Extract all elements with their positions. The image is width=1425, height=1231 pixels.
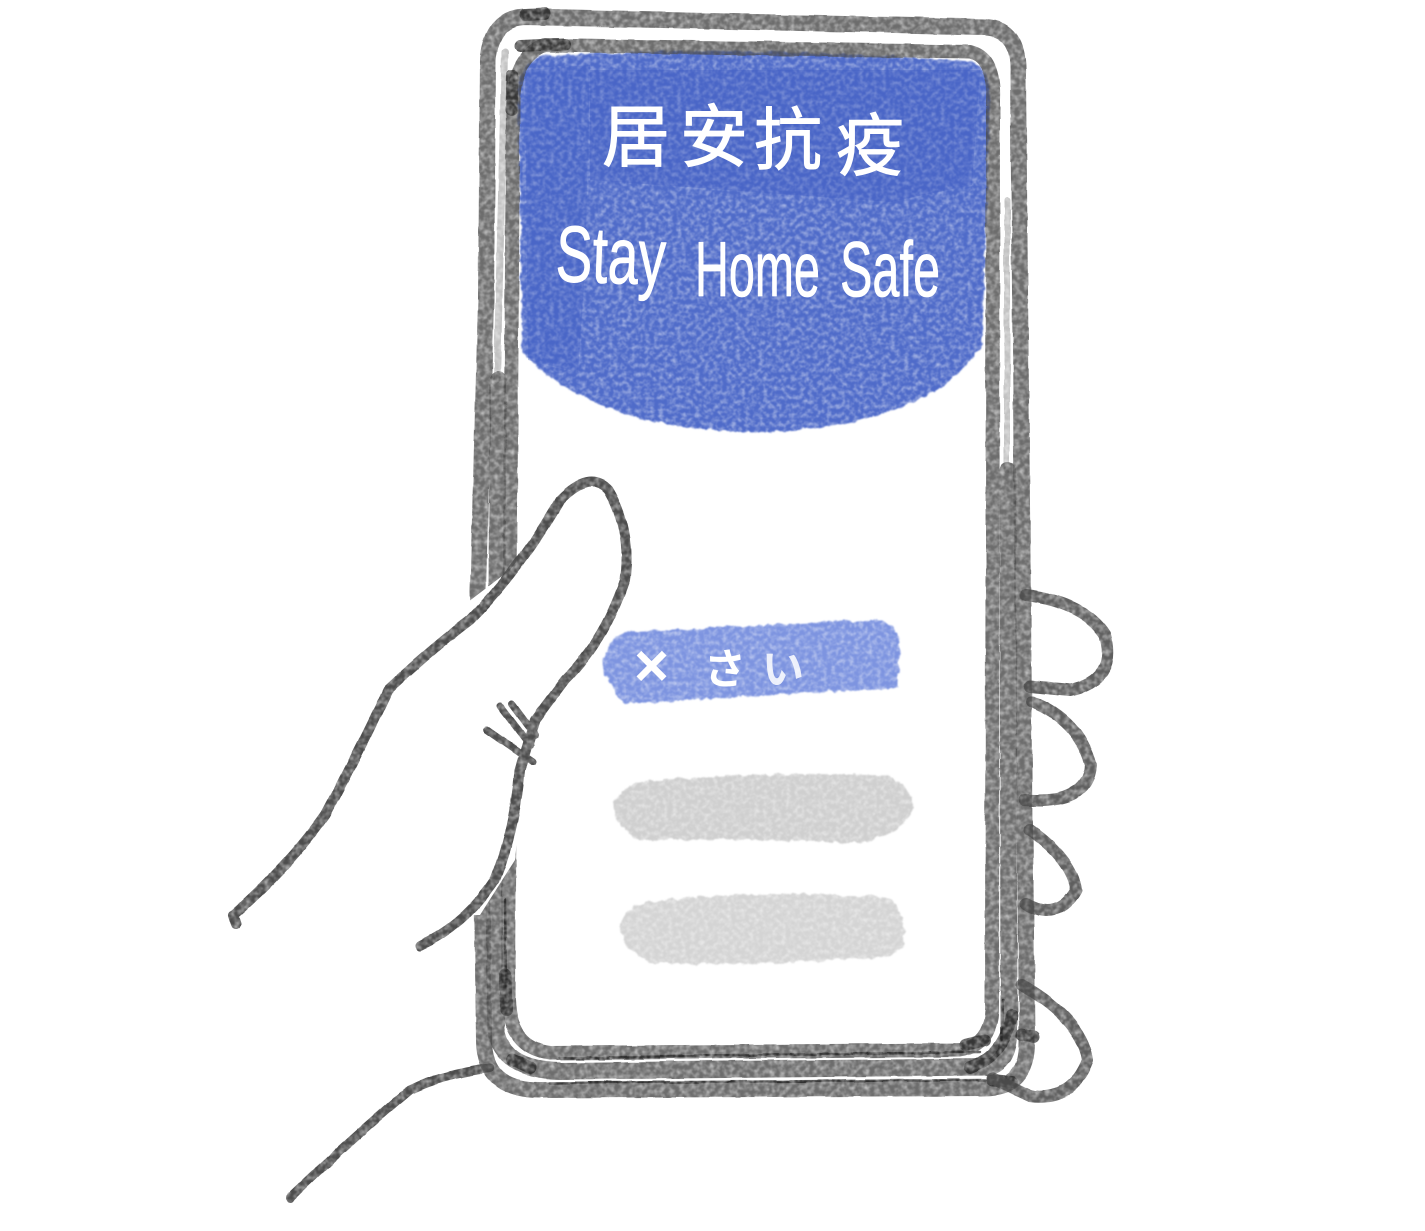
screen white area under the thumb xyxy=(230,480,626,925)
blue button xyxy=(603,620,900,704)
outer stroke xyxy=(478,17,1027,1090)
thin dark seam lines xyxy=(505,900,1003,1083)
fingers on the right xyxy=(992,595,1108,1097)
blue screen header xyxy=(518,51,990,432)
title: English: Safe xyxy=(840,225,940,313)
title: Chinese: 居安抗疫 xyxy=(602,100,904,185)
middle stroke xyxy=(494,380,1009,1071)
title: English: Stay xyxy=(554,209,667,302)
phone body outline xyxy=(478,14,1034,1090)
button text: × xyxy=(634,632,669,699)
title: English: Home xyxy=(695,225,820,313)
faint upper right stroke xyxy=(1004,200,1010,470)
dark overlap marks xyxy=(505,14,1034,1082)
hand outline: thumb and palm xyxy=(233,482,627,1198)
darker header band xyxy=(590,70,980,202)
thumb knuckle creases xyxy=(487,704,535,762)
darker left strip xyxy=(525,65,590,372)
button text: い xyxy=(762,646,804,693)
grey button 1 xyxy=(613,774,912,843)
button text: さ xyxy=(704,646,746,693)
title: English xyxy=(554,209,940,313)
grey button 2 xyxy=(620,894,904,964)
inner stroke xyxy=(508,45,993,1053)
faint upper left stroke xyxy=(497,52,505,380)
lower palm xyxy=(290,1068,490,1198)
